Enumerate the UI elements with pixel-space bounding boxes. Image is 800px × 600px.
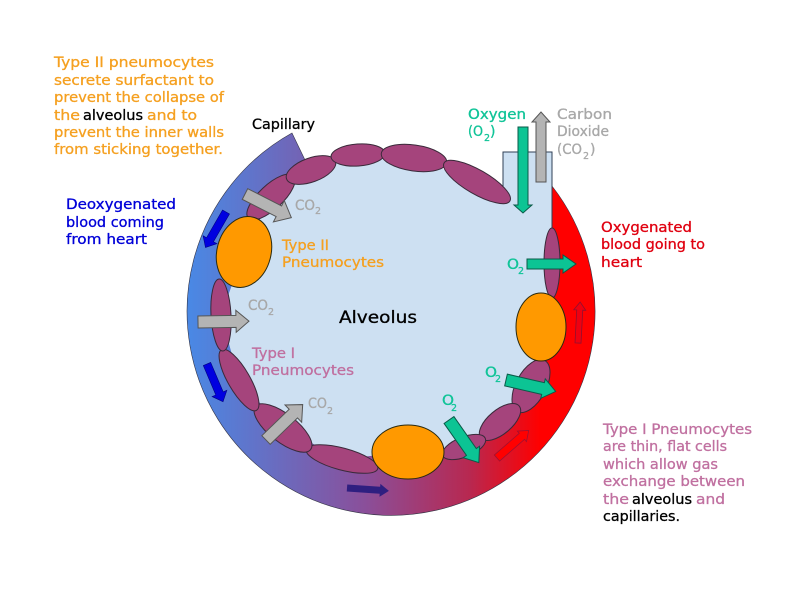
label: carbon dioxide: ) [590, 142, 595, 158]
arrow: CO2 left [198, 310, 249, 333]
label: CO2 lower: 2 [327, 406, 333, 417]
arrow: blood flow upper left [199, 208, 233, 252]
label: CO2 lower: CO [308, 396, 327, 412]
text: type I pneumocytes note: Type I Pneumocytes [602, 422, 752, 438]
text: type I pneumocytes note: exchange between [603, 474, 745, 490]
label: alveolus: Alveolus [339, 308, 417, 328]
label: carbon dioxide: Carbon [557, 107, 612, 123]
label: CO2 upper: 2 [315, 206, 321, 217]
text: type I pneumocytes note: capillaries. [603, 509, 680, 525]
label: type I pneumocytes [251, 346, 354, 379]
text: oxygenated blood: heart [601, 255, 643, 271]
tube walls [503, 152, 552, 240]
label: carbon dioxide: (CO [557, 142, 582, 158]
text: type II pneumocytes note: Type II pneumocytes [53, 55, 214, 71]
text: type II pneumocytes note: from sticking together. [54, 142, 223, 158]
label: type II pneumocytes: Type II [281, 238, 329, 254]
label: O2 middle [485, 365, 501, 385]
type I pneumocyte cells [209, 141, 560, 479]
text: deoxygenated blood: from heart [66, 232, 148, 248]
arrow: carbon dioxide out [532, 112, 550, 182]
text: oxygenated blood: blood going to [601, 237, 705, 253]
label: CO2 upper: CO [295, 198, 315, 214]
label: CO2 left: CO [248, 298, 268, 314]
text: type I pneumocytes note: which allow gas [603, 457, 718, 473]
label: O2 lower: 2 [451, 403, 457, 414]
arrow: blood flow bottom [347, 482, 389, 497]
label: type II pneumocytes: Pneumocytes [282, 255, 384, 271]
label: CO2 left: 2 [268, 307, 274, 318]
label: carbon dioxide [557, 107, 612, 162]
text: type I pneumocytes note: the [603, 492, 629, 508]
label: oxygen: ) [490, 124, 495, 140]
arrow: CO2 upper [240, 183, 297, 228]
text: type I pneumocytes note: alveolus [632, 492, 692, 508]
text: type II pneumocytes note [53, 55, 225, 158]
label: CO2 left [248, 298, 274, 318]
text: oxygenated blood [601, 220, 705, 271]
arrow: oxygen right upper [527, 255, 576, 273]
label: capillary: Capillary [252, 117, 315, 133]
label: O2 middle: O [485, 365, 497, 381]
type II pneumocyte cells [209, 210, 566, 479]
text: deoxygenated blood [66, 197, 176, 248]
label: oxygen [468, 107, 526, 144]
text: type I pneumocytes note [602, 422, 752, 525]
label: carbon dioxide: 2 [583, 151, 589, 162]
label: O2 upper: 2 [518, 266, 524, 277]
label: CO2 upper [295, 198, 321, 217]
arrow: oxygen right lower [441, 414, 487, 468]
text: type II pneumocytes note: prevent the collapse of [54, 90, 225, 106]
arrow: CO2 lower [258, 396, 311, 449]
text: oxygenated blood: Oxygenated [601, 220, 692, 236]
text: type II pneumocytes note: prevent the inner walls [54, 125, 224, 141]
label: carbon dioxide: Dioxide [557, 124, 609, 140]
text: type I pneumocytes note: and [696, 492, 725, 508]
label: CO2 lower [308, 396, 333, 417]
arrow: blood flow lower right [492, 425, 533, 463]
label: oxygen: (O [468, 124, 483, 140]
label: O2 lower: O [442, 393, 454, 409]
label: oxygen: 2 [484, 133, 490, 144]
text: type II pneumocytes note: the [54, 108, 80, 124]
label: O2 middle: 2 [495, 374, 501, 385]
arrow: oxygen right middle [504, 370, 558, 401]
text: deoxygenated blood: Deoxygenated [66, 197, 176, 213]
text: deoxygenated blood: blood coming [66, 215, 164, 231]
label: O2 upper: O [507, 257, 519, 273]
label: type I pneumocytes: Pneumocytes [252, 363, 354, 379]
text: type II pneumocytes note: alveolus [83, 108, 143, 124]
text: type I pneumocytes note: are thin, flat cells [603, 439, 727, 455]
label: O2 upper [507, 257, 524, 277]
alveolus air space [221, 152, 552, 459]
capillary ring [187, 133, 595, 515]
label: type II pneumocytes [281, 238, 384, 271]
label: oxygen: Oxygen [468, 107, 526, 123]
arrow: blood flow lower left [200, 361, 230, 405]
arrow: blood flow right [572, 302, 586, 343]
arrow: oxygen in [514, 127, 532, 213]
text: type II pneumocytes note: secrete surfactant to [54, 73, 214, 89]
label: O2 lower [442, 393, 457, 414]
text: type II pneumocytes note: and to [147, 108, 197, 124]
label: type I pneumocytes: Type I [251, 346, 295, 362]
